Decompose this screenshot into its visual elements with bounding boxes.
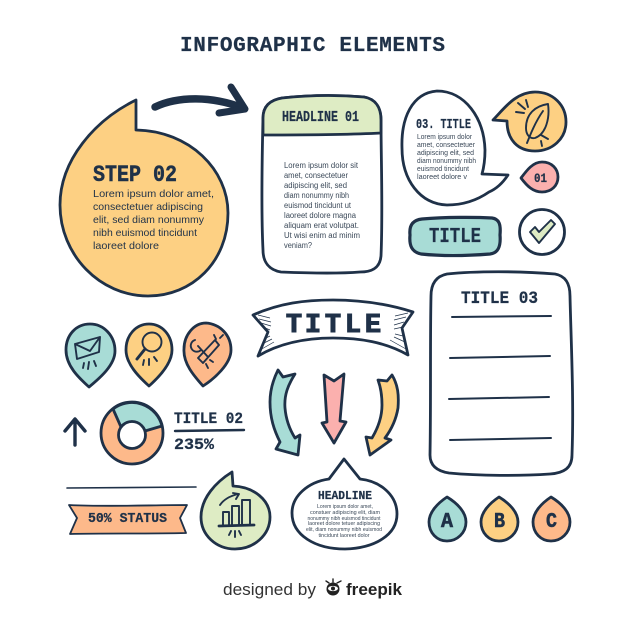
panel: step 02 speech bubble: Lorem ipsum dolor amet, (93, 188, 214, 200)
panel: 03 title speech bubble: adipiscing elit, sed (417, 150, 474, 157)
divider line (67, 487, 196, 488)
ribbon: 50% status: 50% STATUS (88, 511, 167, 527)
ribbon: title banner (253, 300, 413, 356)
arrow: pink down arrow (322, 374, 346, 443)
panel: 03 title speech bubble: diam nonummy nibh (417, 158, 476, 165)
headline 01 body text: adipiscing elit, sed (284, 181, 347, 190)
ribbon: 50% status (69, 505, 187, 534)
headline 01 body text: diam nonummy nibh (284, 191, 349, 200)
headline 01 body text: Lorem ipsum dolor sit (284, 161, 359, 170)
icon: chart speech bubble (201, 472, 270, 549)
icon: up arrow (65, 419, 85, 445)
headline 01 body text: Ut wisi enim ad minim (284, 231, 360, 240)
panel: headline speech bubble: HEADLINE (318, 489, 372, 503)
panel: headline speech bubble (292, 459, 397, 549)
panel: headline speech bubble: nonummy nibh euismod tincidunt (308, 516, 381, 522)
panel: step 02 speech bubble: laoreet dolore (93, 240, 159, 252)
headline 01 body text (284, 161, 360, 250)
icon: C drop (533, 497, 570, 541)
panel: 03 title speech bubble: Lorem ipsum dolor (417, 134, 473, 141)
icon: 01 pink pin: 01 (534, 171, 547, 186)
panel: step 02 speech bubble: STEP 02 (93, 162, 177, 188)
headline 01 body text: laoreet dolore magna (284, 211, 357, 220)
icon: C drop: C (546, 511, 557, 534)
label: title pill: TITLE (429, 226, 481, 249)
icon: tools pin (184, 323, 231, 386)
stat: title 02: TITLE 02 (174, 410, 243, 428)
icon: freepik logo (326, 579, 341, 596)
stat: title 02 (174, 410, 244, 454)
icon: leaf speech bubble (493, 92, 566, 151)
icon: 01 pink pin (521, 162, 558, 192)
icon: B drop: B (494, 511, 505, 534)
panel: 03 title speech bubble: 03. TITLE (416, 117, 471, 133)
headline 01 header band (263, 96, 381, 135)
stat: title 02: 235% (174, 436, 214, 454)
icon: mail pin (66, 324, 115, 387)
icon: check circle (520, 210, 564, 254)
panel: headline speech bubble: elit, diam nonummy nibh euismod (306, 527, 382, 533)
icon: B drop (481, 497, 518, 541)
arrow: teal curved arrow (270, 370, 300, 455)
panel: 03 title speech bubble: amet, consectetuer (417, 142, 476, 149)
panel: headline speech bubble: constuer adipiscing elit, diam (310, 510, 380, 516)
panel: step 02 speech bubble: consectetuer adipiscing (93, 201, 203, 213)
chart: donut (101, 402, 163, 464)
footer: designed by freepik (223, 579, 403, 599)
title 03 lines (449, 316, 551, 440)
title: INFOGRAPHIC ELEMENTS (180, 35, 445, 58)
headline 01 body text: euismod tincidunt ut (284, 201, 352, 210)
panel: headline speech bubble: laoreet dolore tetuer adipiscing (308, 521, 380, 527)
headline 01 body text: amet, consectetuer (284, 171, 348, 180)
panel: 03 title speech bubble (402, 91, 508, 205)
panel: headline 01 card: HEADLINE 01 (282, 110, 359, 126)
panel: 03 title speech bubble: laoreet dolore v (417, 174, 468, 181)
headline 01 body text: veniam? (284, 241, 312, 250)
panel: headline 01 card (262, 96, 382, 273)
panel: headline speech bubble: tincidunt laoreet dolor (318, 533, 370, 539)
footer: designed by freepik: designed by (223, 580, 317, 599)
title 03 card (430, 272, 573, 475)
panel: step 02 speech bubble: elit, sed diam nonummy (93, 214, 205, 226)
arrow: yellow curved arrow (366, 375, 398, 455)
footer: designed by freepik: freepik (346, 580, 403, 599)
panel: headline speech bubble: Lorem ipsum dolor amet, (317, 504, 373, 510)
icon: magnifier pin (126, 324, 172, 386)
label: title pill (410, 217, 500, 256)
ribbon: title banner: TITLE (286, 311, 381, 341)
icon: A drop: A (441, 511, 453, 534)
title 03 card: TITLE 03 (461, 289, 538, 309)
panel: 03 title speech bubble: euismod tincidunt (417, 166, 469, 173)
headline 01 body text: aliquam erat volutpat. (284, 221, 359, 230)
arrow: curved navy arrow (155, 87, 245, 113)
icon: A drop (429, 497, 466, 541)
panel: step 02 speech bubble: nibh euismod tincidunt (93, 227, 197, 239)
panel: step 02 speech bubble (60, 100, 228, 296)
